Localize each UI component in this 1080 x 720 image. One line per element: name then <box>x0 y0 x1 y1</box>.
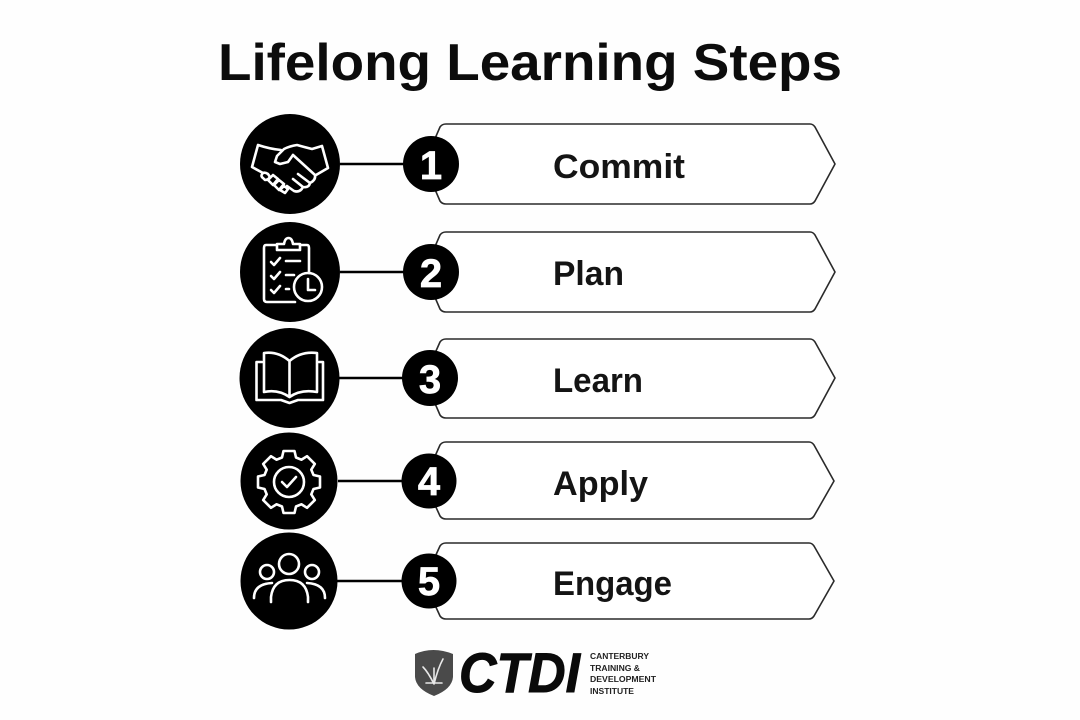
label arrow: Plan <box>424 232 835 312</box>
connector line <box>340 271 404 273</box>
title: Lifelong Learning Steps <box>218 34 842 92</box>
connector line <box>338 480 404 482</box>
step 5: Engage <box>240 532 834 630</box>
logo: CTDI <box>415 641 656 704</box>
step 4: Apply <box>240 432 834 530</box>
number badge 4: 4 <box>418 460 441 504</box>
label arrow: Commit: Commit <box>553 148 685 186</box>
logo institute name: INSTITUTE <box>590 687 635 696</box>
number badge 3: 3 <box>419 358 441 402</box>
step 3: Learn <box>240 328 835 428</box>
label arrow: Plan: Plan <box>553 255 624 293</box>
logo institute name: CANTERBURY <box>590 652 650 661</box>
connector line <box>337 580 404 582</box>
number badge 1: 1 <box>420 144 442 188</box>
step 1: Commit <box>240 114 835 214</box>
icon: shield <box>415 650 453 696</box>
number badge 4 <box>402 454 456 508</box>
logo institute name: DEVELOPMENT <box>590 675 656 684</box>
label arrow: Learn: Learn <box>553 362 643 400</box>
connector line <box>340 163 404 165</box>
label arrow: Engage: Engage <box>553 565 672 603</box>
number badge 1 <box>403 136 459 192</box>
logo institute name <box>590 652 656 696</box>
label arrow: Engage <box>424 543 834 619</box>
number badge 5 <box>402 554 456 608</box>
label arrow: Learn <box>424 339 835 418</box>
number badge 3 <box>402 350 458 406</box>
step 2: Plan <box>240 222 835 322</box>
icon: clipboard with clock <box>240 222 340 322</box>
label arrow: Apply: Apply <box>553 465 648 503</box>
logo institute name: TRAINING & <box>590 664 640 673</box>
label arrow: Apply <box>424 442 834 519</box>
icon: handshake <box>240 114 340 214</box>
logo wordmark: CTDI <box>459 641 581 704</box>
number badge 5: 5 <box>418 560 440 604</box>
icon: open book <box>240 328 340 428</box>
icon: group of people <box>240 532 338 630</box>
icon: gear with check <box>240 432 338 530</box>
connector line <box>339 377 404 379</box>
number badge 2 <box>403 244 459 300</box>
label arrow: Commit <box>424 124 835 204</box>
number badge 2: 2 <box>420 252 442 296</box>
